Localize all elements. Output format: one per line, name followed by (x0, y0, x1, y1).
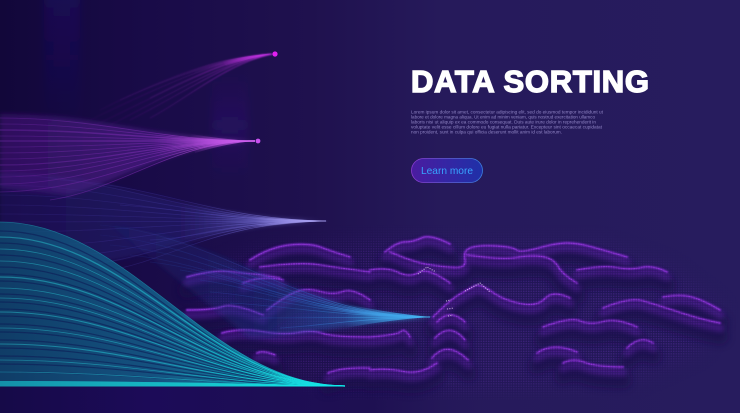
mesh dot haze (198, 236, 719, 397)
body paragraph (411, 110, 604, 136)
bright strands (0, 222, 345, 386)
vertical light streaks (44, 0, 248, 180)
mesh grid overlay (192, 236, 721, 382)
body paragraph: labore et dolore magna aliqua. Ut enim ad minim veniam, quis nostrud exercitation ullamco (411, 114, 595, 120)
white peak highlights (418, 267, 490, 316)
fan 2 soft wedge (0, 114, 256, 195)
fan 2 tip (190, 134, 255, 153)
body paragraph: laboris nisi ut aliquip ex ea commodo consequat. Duis aute irure dolor in reprehenderit in (411, 120, 596, 126)
soft purple slopes (187, 242, 720, 378)
fan 3: blue-violet strands (0, 175, 326, 270)
body paragraph: Lorem ipsum dolor sit amet, consectetur adipiscing elit, sed do eiusmod tempor incididunt ut (411, 110, 604, 116)
button: learn more (412, 158, 482, 182)
body paragraph: voluptate velit esse cillum dolore eu fugiat nulla pariatur. Excepteur sint occaecat cupidatat (411, 124, 603, 130)
ridge glow (187, 237, 720, 373)
fan 5: teal wave (0, 222, 345, 386)
fan 1 tip (222, 54, 270, 66)
bottom band (0, 386, 740, 413)
wave mesh: dotted purple mountains (182, 234, 728, 397)
teal wave body (0, 222, 345, 386)
fan 4 soft wedge (110, 225, 433, 338)
fan 1: top pink strands (60, 54, 272, 135)
fan 3 tip (255, 216, 328, 228)
ridge dots (187, 237, 720, 373)
teal baseline (0, 381, 345, 386)
fan 2: purple strands (0, 118, 255, 200)
ridge shadows (187, 250, 720, 386)
button: learn more: Learn more (421, 165, 473, 177)
body paragraph: non proident, sunt in culpa qui officia deserunt mollit anim id est laborum. (411, 130, 562, 136)
title: DATA SORTING (411, 64, 649, 99)
dark separating strands (0, 231, 340, 386)
icon: middle violet dot (256, 139, 260, 143)
fan 3 soft wedge (0, 172, 328, 262)
fan 4 tip (345, 304, 432, 328)
icon: top pink dot (272, 51, 278, 57)
fan 4: blue strands to mesh (100, 225, 430, 328)
